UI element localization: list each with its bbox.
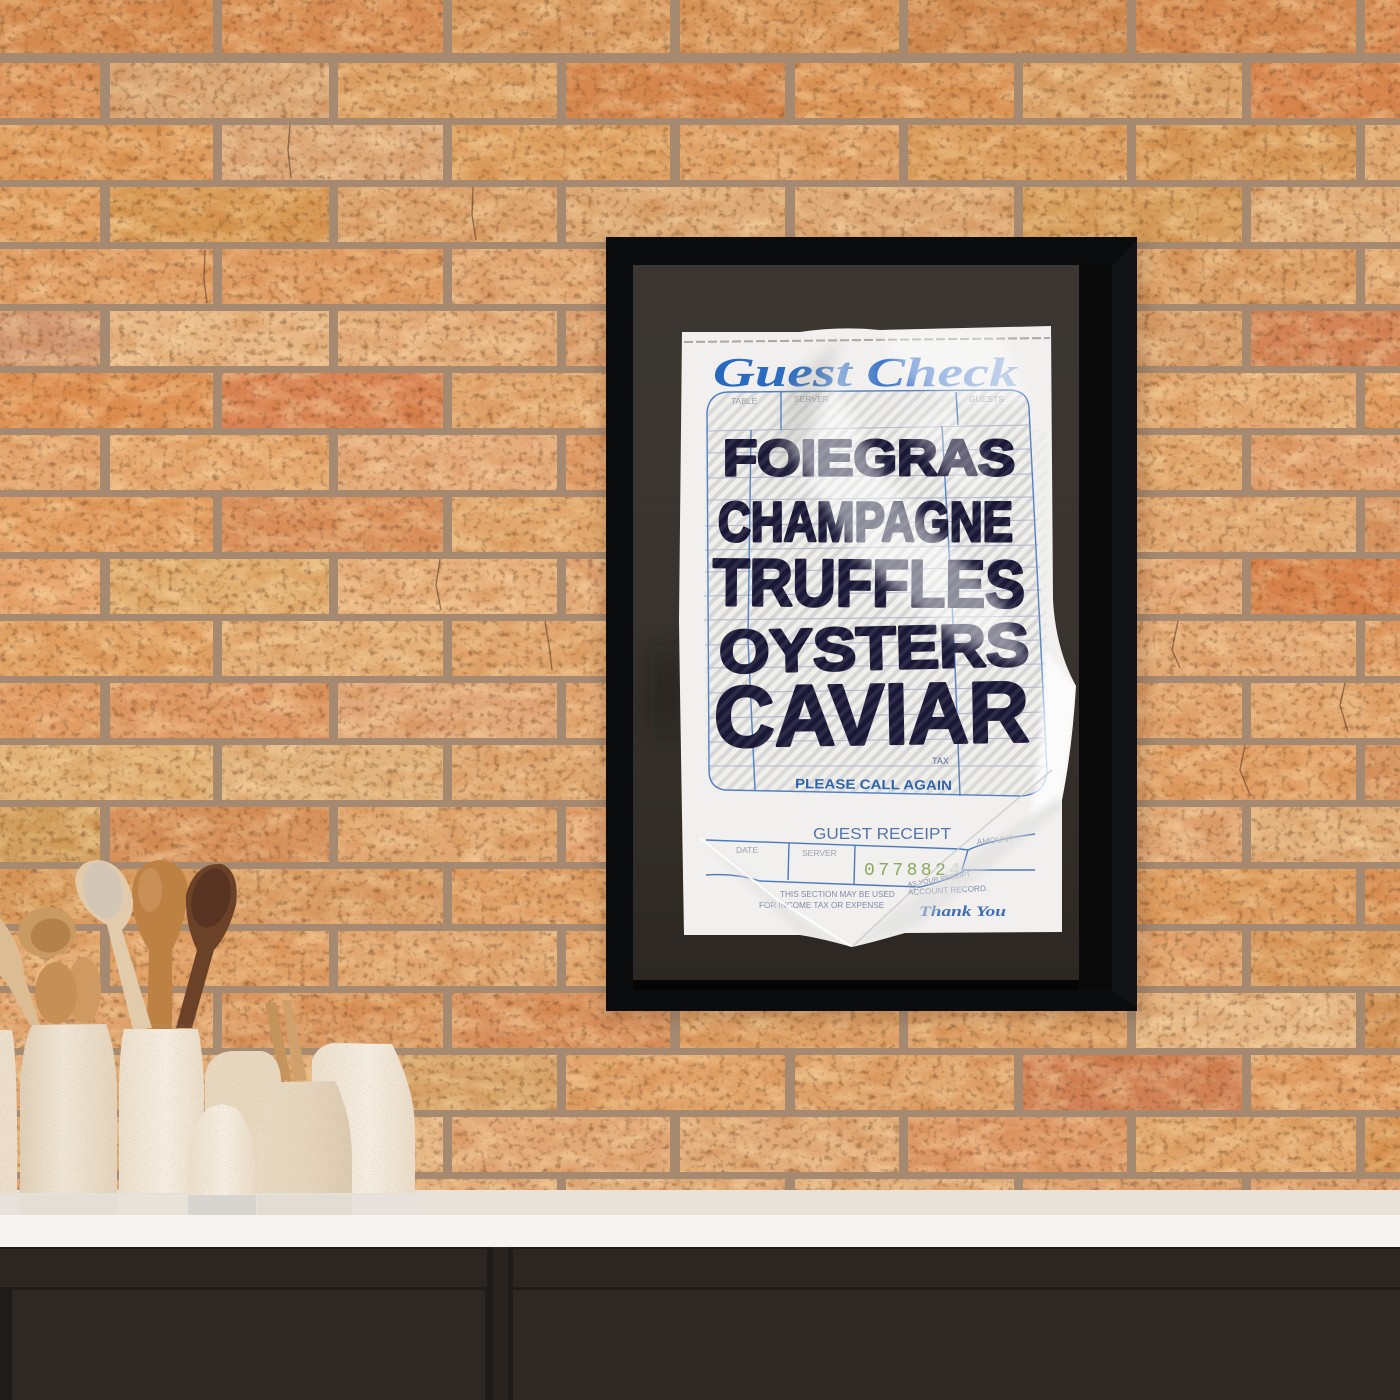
receipt footer text: ACCOUNT RECORD. <box>908 884 988 897</box>
cabinet <box>0 1247 1400 1400</box>
receipt labels: DATE <box>736 845 758 855</box>
perforation line <box>684 338 1050 342</box>
cabinet top rail left <box>0 1249 487 1287</box>
middle wooden spoon <box>132 860 188 1030</box>
left spoon bowl <box>14 902 80 962</box>
receipt labels: AMOUNT <box>976 833 1014 847</box>
receipt footer text: THIS SECTION MAY BE USED <box>780 890 895 899</box>
counter surface <box>0 1190 1400 1215</box>
item: Caviar: CAVIAR <box>713 664 1030 766</box>
counter reflections <box>20 1195 352 1215</box>
dark wooden spoon <box>176 864 237 1028</box>
receipt heading: GUEST RECEIPT <box>813 826 952 843</box>
item: Oysters: OYSTERS <box>718 611 1030 686</box>
receipt labels <box>736 836 1013 856</box>
cabinet door right <box>513 1290 1400 1400</box>
handwritten menu items <box>713 430 1030 766</box>
pale wooden spoon <box>75 857 152 1030</box>
frame: dark mat board <box>633 265 1079 980</box>
receipt footer text <box>759 871 988 910</box>
vase: tall left <box>20 1024 117 1193</box>
ruled order grid <box>704 390 1047 796</box>
vase: far left sliver <box>0 1030 17 1193</box>
paper guest check <box>679 326 1078 947</box>
grid header labels: TABLE <box>731 396 758 406</box>
paper creases and gloss <box>700 330 1078 947</box>
item: Truffles: TRUFFLES <box>713 545 1025 621</box>
far left wooden spoon <box>0 918 40 1025</box>
frame: right inner face <box>1112 240 1137 1008</box>
frame: mat shadow <box>650 645 684 735</box>
brick cracks <box>204 125 1348 795</box>
receipt footer text: FOR INCOME TAX OR EXPENSE <box>759 901 885 910</box>
thank you: Thank You <box>919 904 1006 920</box>
picture frame <box>606 237 1137 1011</box>
cabinet top rail right <box>513 1249 1400 1287</box>
grid header labels: SERVER <box>794 394 829 404</box>
frame: inner shadow box <box>633 265 1112 990</box>
vase: back right <box>312 1043 415 1193</box>
vase: front tan <box>257 1081 352 1193</box>
please call again: PLEASE CALL AGAIN <box>795 776 952 793</box>
heading: Guest Check: Guest Check <box>713 349 1019 395</box>
hatch over ink <box>705 430 1047 760</box>
receipt number: 0778824 <box>864 861 960 881</box>
utensils and ceramic vessels <box>0 857 416 1215</box>
frame shadow on wall <box>600 240 1148 1022</box>
item: Champagne: CHAMPAGNE <box>718 490 1013 553</box>
receipt footer text: AS YOUR RECEIPT <box>907 871 972 889</box>
vase: back center <box>205 1051 281 1193</box>
item: Foie Gras: FOIEGRAS <box>723 430 1015 486</box>
vase: tall center <box>119 1029 204 1193</box>
receipt labels: SERVER <box>802 848 837 858</box>
wooden eggs <box>35 957 101 1024</box>
counter front edge <box>0 1215 1400 1247</box>
vase: small dome <box>188 1104 255 1195</box>
grid header labels <box>731 396 1004 404</box>
small tax label: TAX <box>932 756 949 766</box>
countertop <box>0 1190 1400 1247</box>
cabinet door left <box>12 1290 485 1400</box>
guest receipt section <box>706 826 1035 920</box>
wooden sticks <box>265 1000 307 1080</box>
grid header labels: GUESTS <box>969 394 1004 404</box>
ceramic speckle <box>0 1024 416 1194</box>
cabinet stile <box>493 1247 508 1400</box>
